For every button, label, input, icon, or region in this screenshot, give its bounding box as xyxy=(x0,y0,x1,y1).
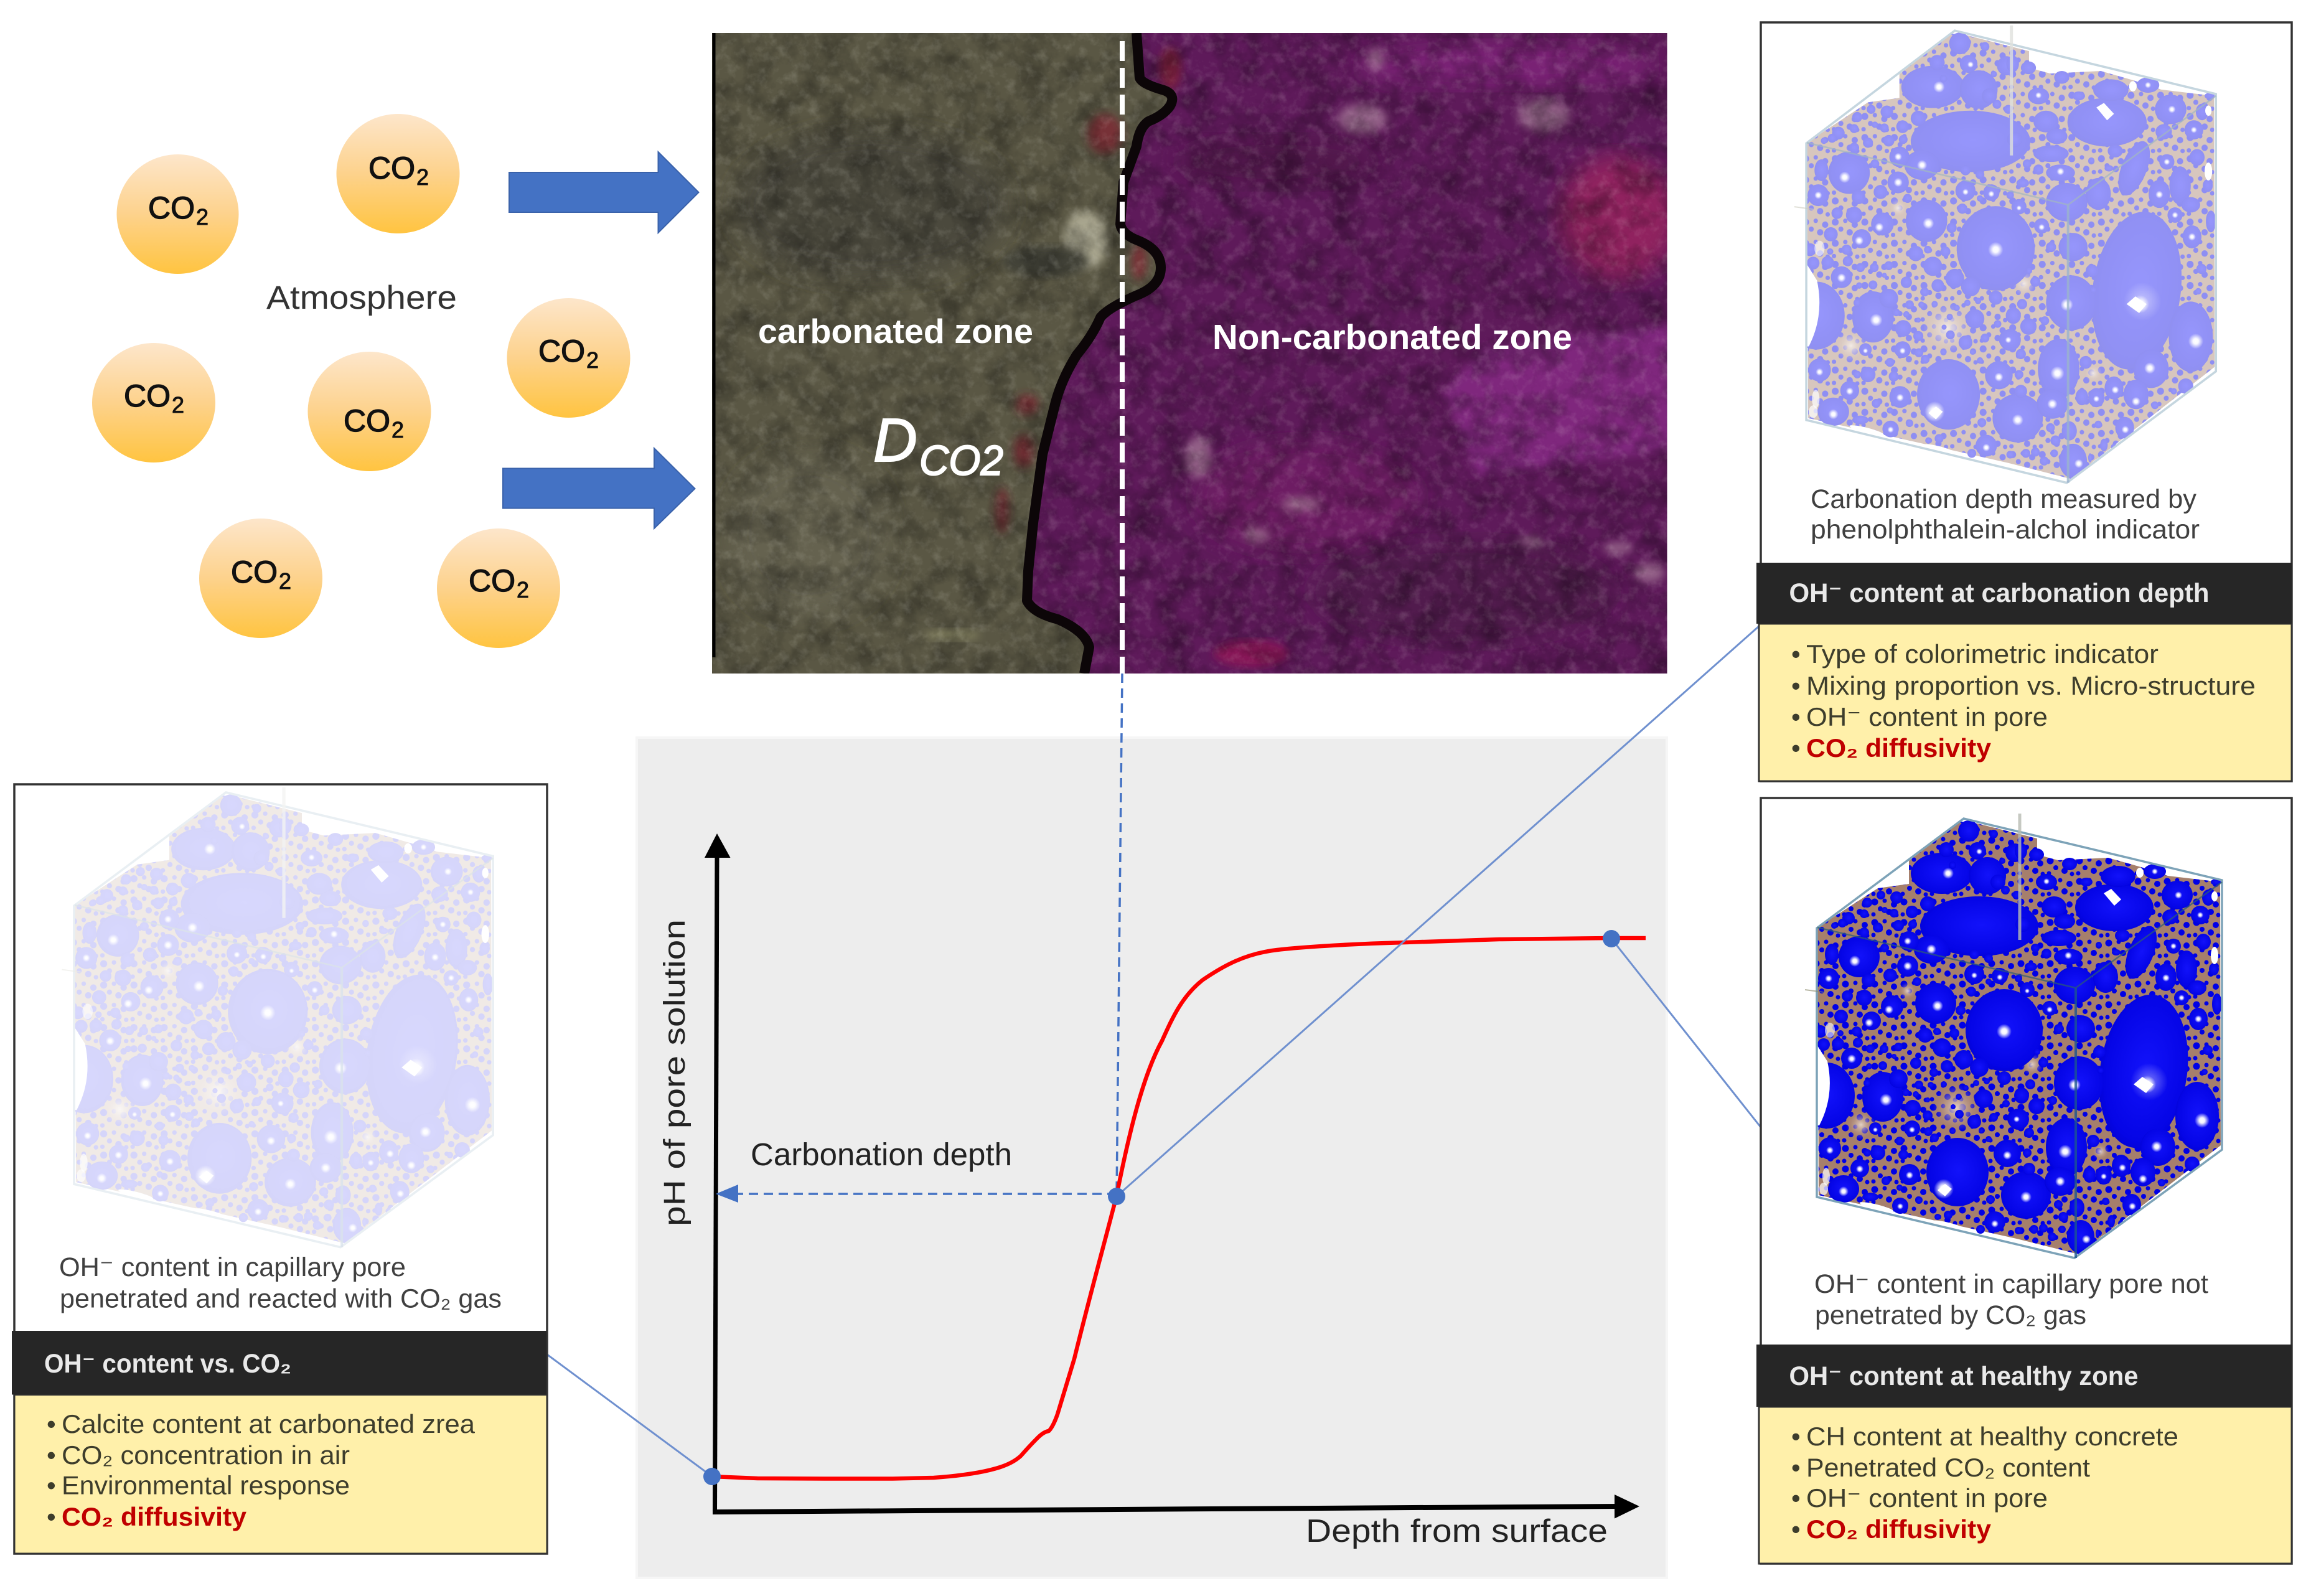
CO2 molecule 1: CO xyxy=(148,190,195,225)
CO2 molecule 7 xyxy=(437,528,560,648)
photo: red reaction fringe xyxy=(996,47,1181,533)
panel frame xyxy=(1761,22,2292,781)
photo: carbonated grey zone xyxy=(712,33,1172,674)
dashed arrow: carbonation depth to y axis xyxy=(716,1185,1117,1203)
label: non-carbonated zone: Non-carbonated zone xyxy=(1212,317,1572,357)
pore structure cube, partly faded xyxy=(1788,26,2216,483)
label: carbonated zone: carbonated zone xyxy=(758,312,1033,350)
CO2 molecule 3: CO xyxy=(538,334,585,368)
data point: surface xyxy=(703,1468,721,1485)
CO2 molecule 1 xyxy=(117,154,239,274)
caption: OH⁻ content in capillary pore xyxy=(59,1252,406,1282)
Atmosphere label: Atmosphere xyxy=(266,279,457,316)
data point: carbonation depth xyxy=(1108,1188,1125,1205)
CO2 molecule 6 xyxy=(199,519,322,638)
y axis arrow xyxy=(705,833,731,1513)
CO2 molecule 4: 2 xyxy=(172,392,184,418)
arrow: CO2 ingress upper xyxy=(509,152,698,233)
black header bar xyxy=(12,1331,546,1394)
CO2 molecule 1: 2 xyxy=(196,204,209,230)
bullet list: • xyxy=(1791,671,1801,700)
bullet list: • xyxy=(47,1440,56,1470)
caption: penetrated and reacted with CO₂ gas xyxy=(60,1284,502,1313)
caption xyxy=(59,1252,502,1313)
panel frame xyxy=(1761,798,2292,1564)
header text: OH⁻ content vs. CO₂ xyxy=(44,1349,291,1379)
header text: OH⁻ content at healthy zone xyxy=(1789,1361,2139,1391)
yellow factor box xyxy=(14,1394,547,1554)
CO2 molecule 3 xyxy=(507,298,630,418)
caption: penetrated by CO₂ gas xyxy=(1815,1300,2086,1330)
bullet list: Type of colorimetric indicator xyxy=(1806,639,2159,669)
y axis label: pH of pore solution xyxy=(659,919,691,1226)
CO2 molecule 5 xyxy=(307,352,431,471)
concrete photo xyxy=(712,31,1677,674)
bullet list: CO₂ concentration in air xyxy=(62,1440,350,1470)
photo: non-carbonated purple zone xyxy=(1032,33,1667,674)
bullet list: • xyxy=(47,1409,56,1439)
bullet list: CO₂ diffusivity xyxy=(1806,1514,1992,1544)
panel: OH- content at healthy zone xyxy=(1756,798,2292,1564)
connector: low pH point xyxy=(547,1354,712,1476)
CO2 molecule 5: 2 xyxy=(391,417,404,443)
black header bar xyxy=(1756,563,2292,624)
CO2 molecule 6: CO xyxy=(231,555,278,589)
bullet list: • xyxy=(47,1471,56,1500)
bullet list: OH⁻ content in pore xyxy=(1806,702,2048,731)
pore structure cube, full colour xyxy=(1799,814,2222,1258)
bullet list: CO₂ diffusivity xyxy=(62,1502,247,1531)
caption: OH⁻ content in capillary pore not xyxy=(1814,1269,2208,1299)
phenolphthalein boundary line xyxy=(1027,33,1172,674)
bullet list: CH content at healthy concrete xyxy=(1806,1422,2178,1451)
bullet list: • xyxy=(1791,1483,1801,1513)
bullet list: • xyxy=(47,1502,56,1531)
CO2 molecule 2 xyxy=(336,114,459,233)
bullet list: Penetrated CO₂ content xyxy=(1806,1453,2090,1482)
pore structure cube, heavily faded xyxy=(55,787,493,1247)
caption xyxy=(1814,1269,2208,1330)
bullet list xyxy=(1791,1422,2178,1544)
dashed guide: photo to curve xyxy=(1117,674,1122,1196)
x axis arrow xyxy=(713,1495,1639,1519)
caption: phenolphthalein-alchol indicator xyxy=(1811,515,2200,545)
CO2 molecule 7: 2 xyxy=(517,577,529,603)
connector: carbonation depth point xyxy=(1117,626,1759,1196)
bullet list: • xyxy=(1791,1453,1801,1482)
label: DCO2 xyxy=(873,406,1003,484)
bullet list: • xyxy=(1791,639,1801,669)
carbonation front dashed line xyxy=(1120,41,1125,674)
label: DCO2: D xyxy=(873,406,917,474)
CO2 molecule 7: CO xyxy=(469,563,515,598)
caption: Carbonation depth measured by xyxy=(1811,484,2196,514)
header text: OH⁻ content at carbonation depth xyxy=(1789,578,2210,608)
panel frame xyxy=(14,784,547,1554)
data point: healthy zone xyxy=(1603,930,1620,947)
bullet list: Calcite content at carbonated zrea xyxy=(62,1409,476,1439)
bullet list: • xyxy=(1791,1422,1801,1451)
label: DCO2: CO2 xyxy=(919,437,1003,484)
CO2 molecule 5: CO xyxy=(344,403,390,438)
caption xyxy=(1811,484,2200,545)
yellow factor box xyxy=(1759,624,2292,781)
CO2 molecule 4 xyxy=(92,343,215,462)
atmosphere CO2 cluster xyxy=(92,114,630,648)
photo left edge xyxy=(712,31,716,657)
CO2 molecule 6: 2 xyxy=(279,568,291,594)
x axis label: Depth from surface xyxy=(1306,1513,1608,1549)
bullet list: • xyxy=(1791,702,1801,731)
black header bar xyxy=(1756,1345,2292,1407)
CO2 molecule 2: CO xyxy=(368,151,415,185)
arrow: CO2 ingress lower xyxy=(503,448,695,528)
bullet list xyxy=(1791,639,2256,763)
red pH curve xyxy=(712,938,1646,1479)
bullet list: OH⁻ content in pore xyxy=(1806,1483,2048,1513)
bullet list: Environmental response xyxy=(62,1471,350,1500)
CO2 molecule 3: 2 xyxy=(586,347,599,373)
panel: pH chart xyxy=(547,626,1761,1578)
bullet list: • xyxy=(1791,733,1801,763)
bullet list xyxy=(47,1409,476,1531)
chart background xyxy=(637,738,1667,1578)
bullet list: • xyxy=(1791,1514,1801,1544)
bullet list: CO₂ diffusivity xyxy=(1806,733,1992,763)
carbonation depth label: Carbonation depth xyxy=(751,1137,1012,1172)
panel: OH- content at carbonation depth xyxy=(1756,22,2292,781)
yellow factor box xyxy=(1759,1407,2292,1564)
connector: healthy zone point xyxy=(1611,939,1761,1127)
photo: surface texture xyxy=(712,33,1667,674)
panel: OH- content vs CO2 xyxy=(12,784,547,1554)
CO2 molecule 2: 2 xyxy=(416,164,429,190)
bullet list: Mixing proportion vs. Micro-structure xyxy=(1806,671,2256,700)
CO2 molecule 4: CO xyxy=(124,378,171,413)
